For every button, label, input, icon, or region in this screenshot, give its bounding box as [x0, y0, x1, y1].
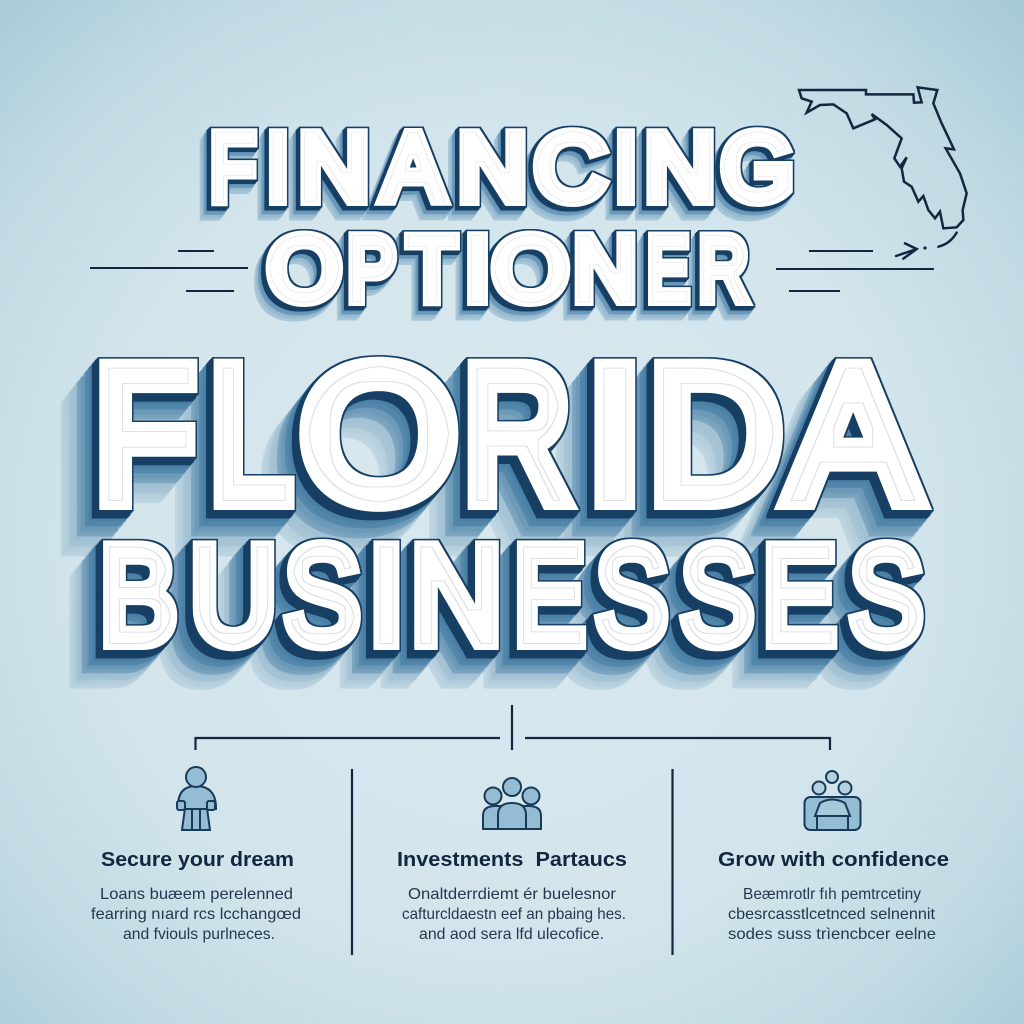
body text: grow with confidence: cbesrcasstlcetnced selnennit: [728, 906, 936, 923]
title line: BUSINESSES: S: [680, 518, 754, 673]
title line: BUSINESSES: [99, 518, 923, 673]
heading: secure your dream: Secure your dream: [101, 849, 294, 871]
body text: investments partaucs: [402, 886, 626, 943]
body text: investments partaucs: and aod sera lfd ulecofice.: [419, 926, 604, 943]
panel: grow with confidence: [718, 771, 949, 943]
title line: OPTIONER: N: [573, 219, 637, 320]
title line: BUSINESSES: I: [368, 518, 405, 673]
title line: FLORIDA: R: [463, 328, 571, 541]
icon: Florida state outline with arrow: [799, 87, 967, 259]
title line: FLORIDA: A: [788, 328, 918, 541]
divider right: [671, 769, 674, 955]
title line: BUSINESSES: S: [849, 518, 923, 673]
title line: FLORIDA: D: [649, 328, 782, 541]
body text: grow with confidence: [728, 886, 936, 943]
body text: grow with confidence: Beæmrotlr fıh pemtrcetiny: [743, 886, 921, 903]
title line: BUSINESSES: B: [99, 518, 178, 673]
connector bracket: [196, 705, 830, 750]
title line: BUSINESSES: S: [284, 518, 360, 673]
title line: FINANCING: C: [534, 114, 607, 221]
title line: BUSINESSES: E: [514, 518, 585, 673]
title line: BUSINESSES: N: [410, 518, 503, 673]
title line: FINANCING: F: [210, 114, 256, 221]
title line: FLORIDA: L: [209, 328, 292, 541]
body text: investments partaucs: Onaltderrdiemt ér buelesnor: [408, 886, 617, 903]
title line: FLORIDA: I: [586, 328, 644, 541]
decorative speed lines left: [90, 251, 248, 291]
title line: FINANCING: N: [298, 114, 370, 221]
title line: OPTIONER: R: [698, 219, 749, 320]
title line: FINANCING: N: [458, 114, 528, 221]
panel: investments partaucs: [397, 778, 627, 943]
body text: secure your dream: and fviouls purlneces.: [123, 926, 275, 943]
icon: person: [177, 767, 216, 830]
title line: OPTIONER: O: [492, 219, 569, 320]
decorative speed lines right: [776, 251, 934, 291]
title line: FINANCING: A: [382, 114, 444, 221]
title line: BUSINESSES: E: [762, 518, 837, 673]
body text: investments partaucs: cafturcldaestn eef an pbaing hes.: [402, 906, 626, 923]
title line: FINANCING: [210, 114, 794, 221]
title line: BUSINESSES: S: [595, 518, 668, 673]
title line: OPTIONER: I: [465, 219, 490, 320]
body text: grow with confidence: sodes suss trìencbcer eelne: [728, 926, 936, 943]
title line: OPTIONER: T: [407, 219, 456, 320]
title line: FINANCING: I: [614, 114, 637, 221]
panel: secure your dream: [91, 767, 301, 943]
heading: grow with confidence: Grow with confidence: [718, 849, 949, 871]
divider left: [351, 769, 353, 955]
body text: secure your dream: [91, 886, 301, 943]
body text: secure your dream: fearring nıard rcs lcchangœd: [91, 906, 301, 923]
title line: OPTIONER: E: [647, 219, 689, 320]
title line: FLORIDA: [94, 328, 918, 541]
body text: secure your dream: Loans buæem perelenned: [100, 886, 293, 903]
icon: group over box: [804, 771, 860, 830]
heading: investments partaucs: Investments Partaucs: [397, 849, 627, 871]
icon: group of people: [483, 778, 541, 829]
title line: FINANCING: N: [644, 114, 716, 221]
title line: OPTIONER: O: [267, 219, 341, 320]
title line: FINANCING: G: [721, 114, 794, 221]
title line: OPTIONER: [267, 219, 749, 320]
title line: FLORIDA: F: [94, 328, 195, 541]
title line: OPTIONER: P: [347, 219, 396, 320]
title line: FINANCING: I: [266, 114, 289, 221]
title line: FLORIDA: O: [300, 328, 458, 541]
title line: BUSINESSES: U: [190, 518, 278, 673]
